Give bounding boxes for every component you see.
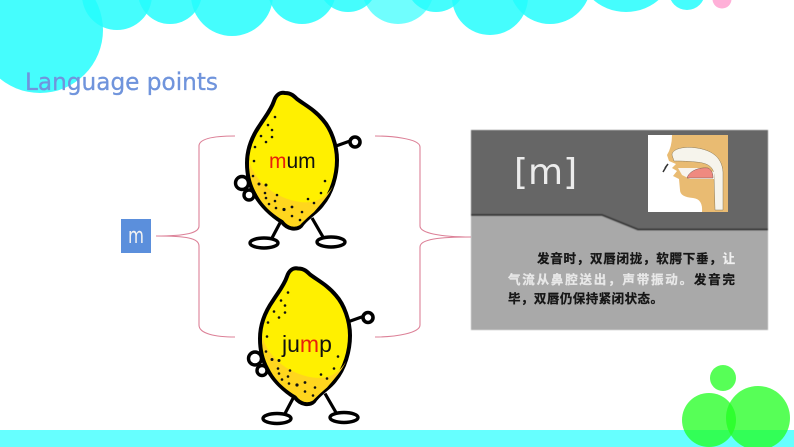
pink dot: [712, 0, 732, 8]
left bracket: [156, 136, 235, 337]
letter box: m: m: [128, 224, 144, 249]
mouth diagram: [648, 135, 728, 212]
word: mum: mum: [269, 150, 316, 173]
lemon character: jump: [248, 268, 373, 424]
lemon character: mum: [236, 93, 360, 248]
green circles: [682, 365, 790, 447]
description text: 毕，双唇仍保持紧闭状态。: [508, 291, 663, 306]
description text: 气流从鼻腔送出，声带振动。发音完: [508, 272, 735, 287]
panel: [m] pronunciation card: [471, 130, 768, 330]
word: jump: jump: [281, 331, 332, 357]
bottom cyan bar: [0, 430, 794, 447]
title: Language points: [25, 68, 218, 96]
phonetic symbol: [m]: [514, 152, 577, 193]
description text: 发音时，双唇闭拢，软腭下垂，让: [537, 251, 735, 266]
letter box: m: [121, 219, 151, 253]
right bracket: [375, 136, 471, 337]
top cloud decoration: [0, 0, 705, 93]
description text: [508, 251, 735, 306]
